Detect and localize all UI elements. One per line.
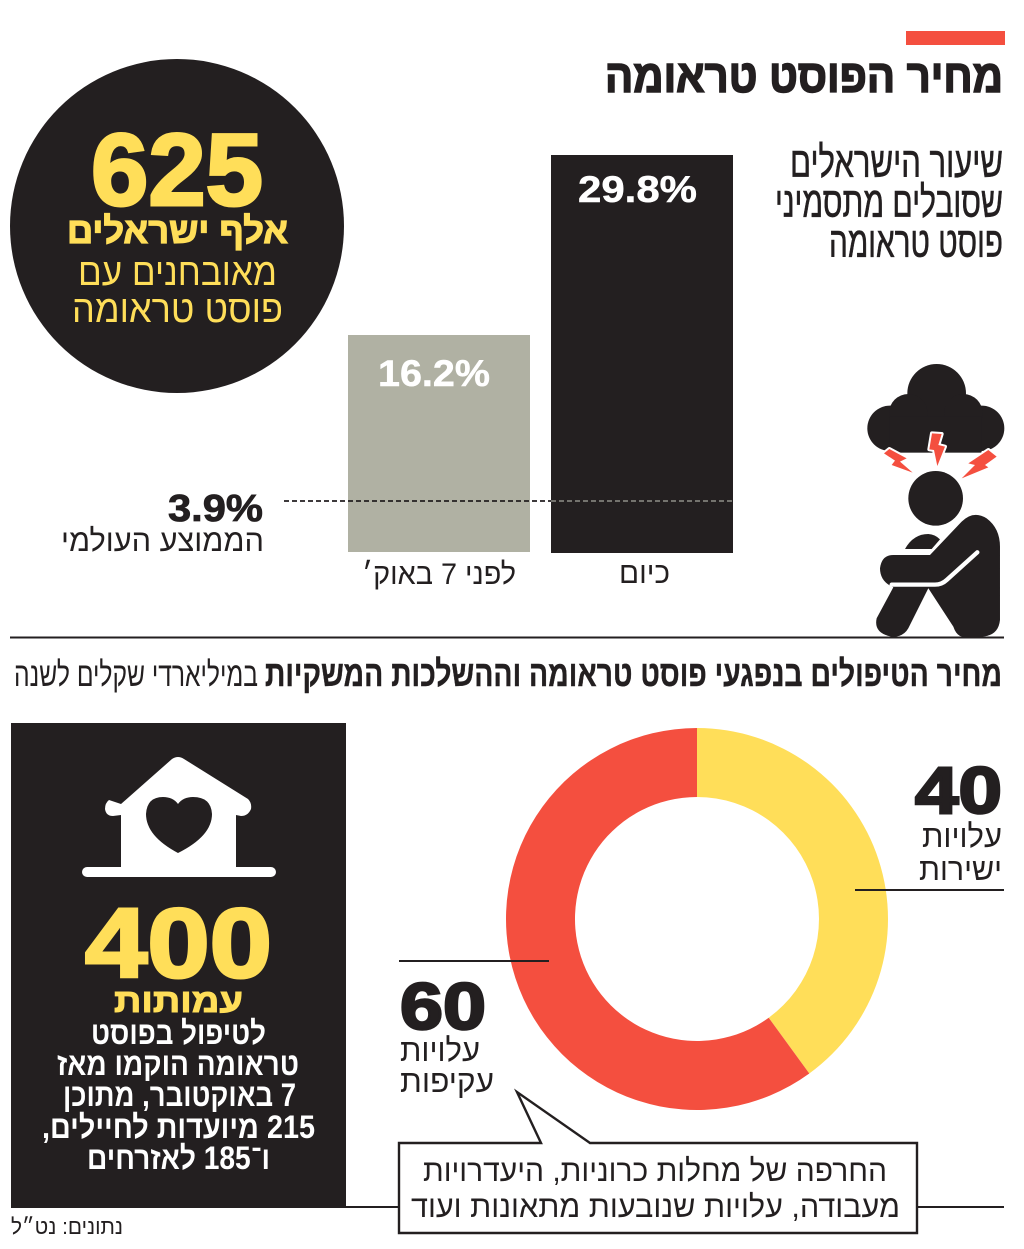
label: world average: 3.9% <box>168 488 263 530</box>
callout <box>399 1092 917 1233</box>
label: associations: עמותות <box>114 982 243 1019</box>
donut chart <box>506 728 888 1110</box>
icon: distressed person under storm cloud <box>867 364 1004 637</box>
bar: before October 7 <box>348 335 530 552</box>
callout: מעבודה, עלויות שנובעות מתאונות ועוד <box>411 1189 900 1224</box>
bar label: before October 7: לפני 7 באוק׳ <box>362 558 516 591</box>
text block: description: טראומה הוקמו מאז <box>57 1046 299 1082</box>
label: indirect costs: עקיפות <box>400 1063 494 1099</box>
panel: 625 thousand circle <box>10 59 344 393</box>
label: direct costs: ישירות <box>919 851 1002 887</box>
callout: החרפה של מחלות כרוניות, היעדרויות <box>423 1153 887 1188</box>
bar: today: 29.8% <box>578 169 697 210</box>
panel: 625 thousand circle: פוסט טראומה <box>72 289 283 331</box>
label: diagnosed with PTSD: מאובחנים עם <box>78 252 277 294</box>
subtitle text block <box>775 139 1003 267</box>
segment: direct costs 40 <box>697 728 888 1074</box>
bar label: today: כיום <box>619 557 670 590</box>
label: direct costs: עלויות <box>922 818 1002 854</box>
label: world average <box>61 488 264 558</box>
label: thousand Israelis: אלף ישראלים <box>67 210 288 251</box>
panel: 400 associations <box>11 723 346 1208</box>
label: direct costs <box>855 753 1004 890</box>
source note: נתונים: נט״ל <box>11 1214 123 1239</box>
segment: indirect costs 60 <box>506 728 809 1110</box>
label: indirect costs: 60 <box>400 969 486 1043</box>
number: 400: 400 <box>85 888 272 998</box>
number: 625: 625 <box>91 113 263 227</box>
text block: description: לטיפול בפוסט <box>91 1015 266 1051</box>
baseline rule <box>346 1206 1004 1208</box>
text block: description: 7 באוקטובר, מתוכן <box>63 1077 296 1113</box>
text block: description <box>42 1015 315 1176</box>
label: direct costs: 40 <box>915 753 1002 827</box>
text block: description: ו־185 לאזרחים <box>87 1140 270 1176</box>
bar: before October 7: 16.2% <box>378 353 490 394</box>
icon: house with heart <box>82 757 276 877</box>
bar: today <box>551 155 733 553</box>
label: indirect costs <box>399 961 549 1099</box>
section heading: במיליארדי שקלים לשנה <box>14 656 258 694</box>
label: indirect costs: עלויות <box>400 1032 480 1068</box>
section divider <box>10 636 1004 638</box>
label: world average: הממוצע העולמי <box>61 523 264 558</box>
text block: description: 215 מיועדות לחיילים, <box>42 1109 315 1145</box>
world average line <box>284 500 733 502</box>
accent bar <box>906 31 1005 45</box>
